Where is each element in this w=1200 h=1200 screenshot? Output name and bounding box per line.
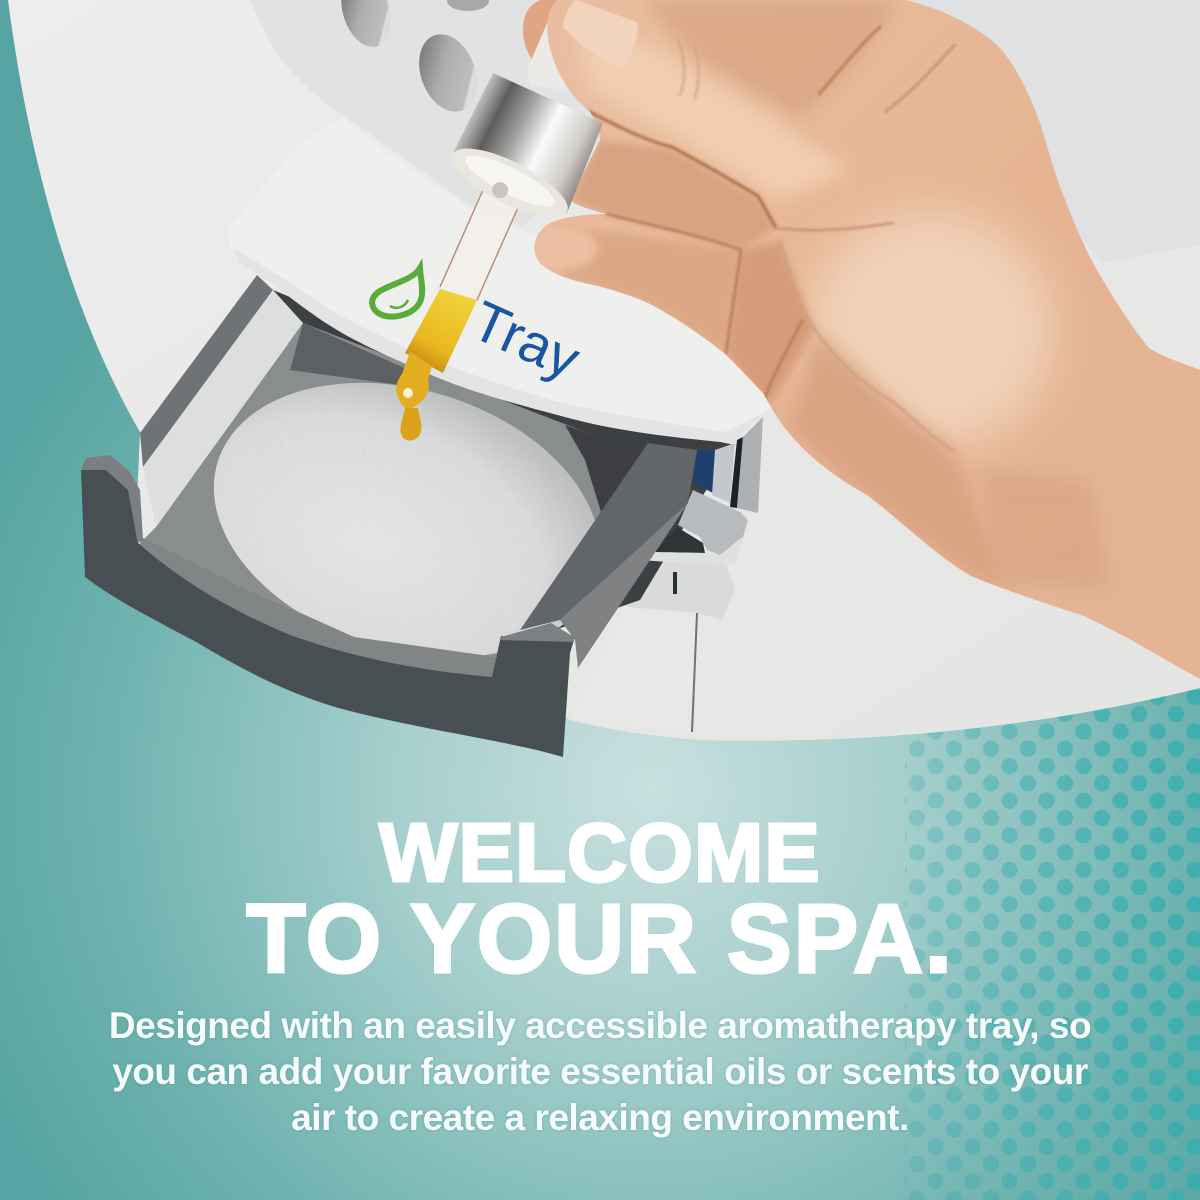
drop bbox=[400, 408, 421, 440]
description text: you can add your favorite essential oils or scents to your bbox=[112, 1051, 1088, 1092]
palm highlight bbox=[805, 210, 1055, 450]
side columns bbox=[712, 417, 763, 513]
glass tube bbox=[440, 190, 520, 300]
device lower panels bbox=[570, 552, 735, 732]
halftone dots bbox=[905, 690, 1200, 1200]
tray floor bbox=[143, 323, 640, 657]
tray left inner wall bbox=[143, 290, 303, 527]
heel of hand bbox=[790, 330, 1010, 590]
tray left outer rail bbox=[140, 275, 273, 467]
back of tray interior bbox=[290, 323, 420, 385]
tray front lip bbox=[81, 470, 574, 757]
thumb highlight bbox=[575, 30, 850, 200]
tray right rail bbox=[520, 443, 697, 668]
oil bbox=[405, 289, 477, 373]
device body bbox=[8, 0, 1200, 741]
metal cap bbox=[453, 73, 603, 213]
hand bbox=[533, 0, 1200, 679]
oil tip bbox=[396, 352, 432, 410]
index finger bbox=[560, 225, 741, 353]
tray right post top bbox=[501, 623, 574, 642]
heading bbox=[246, 806, 954, 993]
description text: air to create a relaxing environment. bbox=[291, 1097, 909, 1138]
wrist blotch bbox=[988, 476, 1103, 586]
description text bbox=[109, 1005, 1091, 1138]
blue inner slot bbox=[693, 450, 715, 493]
tray cover bbox=[229, 117, 790, 443]
thumb nail bbox=[563, 0, 638, 67]
dropper bbox=[396, 73, 603, 440]
back of hand top bbox=[648, 0, 891, 116]
tray front strip bbox=[130, 538, 500, 690]
heading: WELCOME bbox=[379, 806, 821, 899]
description text: Designed with an easily accessible aromatherapy tray, so bbox=[109, 1005, 1091, 1046]
device upper right panel bbox=[900, 0, 1200, 263]
tray bbox=[81, 275, 697, 757]
cover logo bbox=[372, 268, 589, 391]
tray left post top bbox=[81, 455, 143, 543]
middle finger bbox=[570, 140, 776, 250]
scent pad bbox=[180, 338, 634, 702]
dropper bulb bbox=[527, 0, 580, 90]
cover logo: Tray bbox=[463, 288, 589, 391]
finger creases bbox=[590, 27, 955, 451]
heading: TO YOUR SPA. bbox=[246, 884, 954, 993]
index fingertip bbox=[533, 226, 597, 270]
latch bbox=[640, 490, 748, 565]
device upper grille bbox=[250, 0, 640, 227]
ring finger group bbox=[726, 241, 815, 405]
tray opening shadow bbox=[273, 290, 735, 630]
finger behind bulb bbox=[523, 0, 560, 60]
